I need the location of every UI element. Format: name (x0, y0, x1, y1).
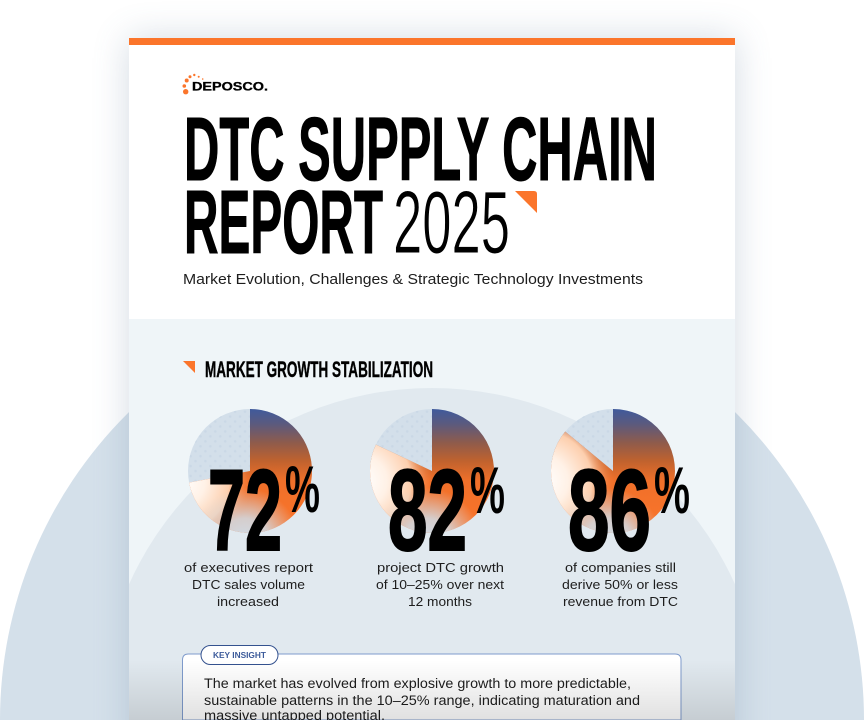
percent sign: % (285, 452, 320, 526)
caption: increased (217, 594, 279, 609)
stat: 82% (370, 409, 505, 609)
pie chart 86% (551, 409, 675, 533)
key insight badge: KEY INSIGHT (213, 650, 267, 660)
logo: Deposco: DEPOSCO. (192, 82, 268, 94)
number 72: 72 (208, 447, 282, 575)
orange top bar (129, 38, 735, 45)
key insight badge (201, 646, 278, 664)
report card (100, 38, 764, 720)
caption: of executives report (184, 560, 313, 575)
caption: DTC sales volume (192, 577, 305, 592)
subtitle: Market Evolution, Challenges & Strategic Technology Investments (183, 272, 643, 288)
caption: derive 50% or less (562, 577, 679, 592)
callout: key insight (182, 646, 681, 720)
bottom fade (129, 676, 735, 720)
inner circle (100, 388, 764, 720)
section heading (183, 361, 432, 378)
caption: revenue from DTC (563, 594, 678, 609)
title (186, 116, 654, 254)
stat: 72% (184, 409, 320, 609)
caption (376, 562, 504, 606)
caption (562, 562, 678, 606)
caption: of 10–25% over next (376, 577, 504, 592)
white header panel (129, 38, 735, 319)
caption: 12 months (408, 594, 473, 609)
caption (184, 562, 313, 606)
background circle (0, 288, 864, 720)
title: 2025 (393, 172, 510, 272)
insight text: sustainable patterns in the 10–25% range, indicating maturation and (204, 693, 640, 708)
stat: 86% (551, 409, 690, 609)
title: REPORT (184, 173, 383, 273)
section panel background (129, 319, 735, 584)
icon: title corner triangle (515, 191, 537, 213)
number 82: 82 (388, 447, 467, 575)
caption: of companies still (565, 560, 676, 575)
percent sign: % (470, 453, 505, 527)
pie chart 82% (370, 409, 494, 533)
insight text (204, 676, 640, 720)
card shadow (129, 38, 735, 720)
caption: project DTC growth (377, 560, 504, 575)
section heading: MARKET GROWTH STABILIZATION (205, 357, 433, 382)
insight text: The market has evolved from explosive growth to more predictable, (204, 676, 631, 691)
pie chart 72% (188, 409, 312, 533)
logo: Deposco (182, 74, 268, 94)
number 86: 86 (568, 447, 651, 575)
percent sign: % (654, 453, 690, 527)
